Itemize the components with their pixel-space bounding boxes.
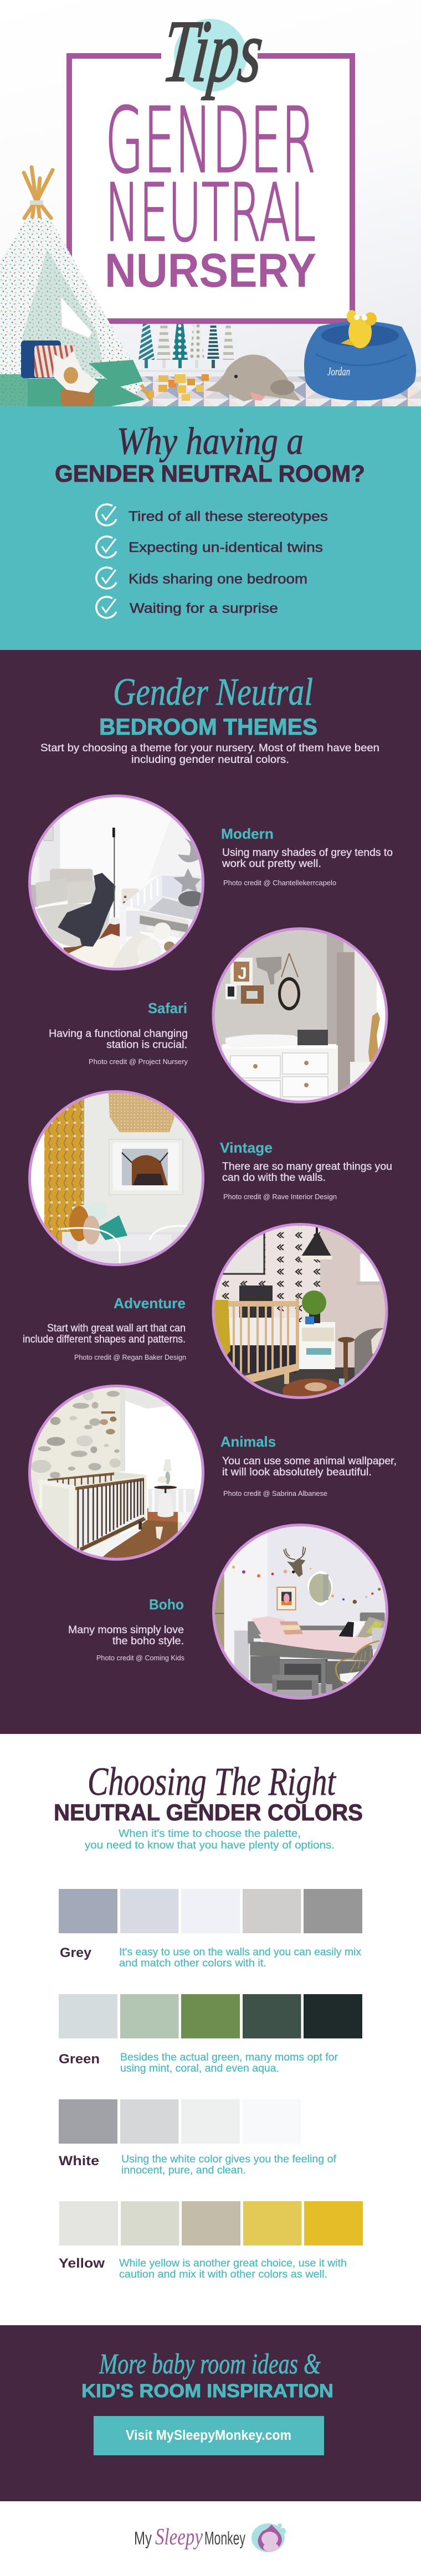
text: safari: Photo credit @ Project Nursery xyxy=(89,1057,188,1066)
text: boho xyxy=(68,1596,184,1662)
photo: animals nursery xyxy=(28,1385,204,1561)
list item 1: Tired of all these stereotypes xyxy=(129,509,328,524)
heading script: More baby room ideas & xyxy=(99,2348,321,2380)
intro text xyxy=(85,1828,335,1851)
text: green: Besides the actual green, many moms opt for xyxy=(120,2052,338,2063)
icon: tips accent circle xyxy=(174,19,247,92)
photo: boho nursery xyxy=(212,1524,388,1700)
text: animals xyxy=(220,1433,397,1498)
text: adventure: Start with great wall art that can xyxy=(47,1323,186,1334)
panel: bedroom themes xyxy=(0,650,421,1734)
floor rug xyxy=(133,370,421,406)
photo: safari nursery xyxy=(212,927,388,1103)
text: safari xyxy=(49,1000,188,1066)
text: adventure xyxy=(23,1295,186,1361)
toy blocks xyxy=(148,374,209,401)
text: safari: station is crucial. xyxy=(106,1039,187,1051)
text: safari: Having a functional changing xyxy=(49,1028,188,1040)
heading bold: NEUTRAL GENDER COLORS xyxy=(54,1799,363,1825)
list item 4: Waiting for a surprise xyxy=(130,601,278,616)
text: adventure: Photo credit @ Regan Baker Design xyxy=(74,1353,186,1361)
swatches: white xyxy=(59,2099,301,2144)
text: grey: and match other colors with it. xyxy=(119,1958,266,1969)
text: white: innocent, pure, and clean. xyxy=(121,2165,246,2176)
text: vintage: There are so many great things you xyxy=(222,1161,392,1173)
text: animals: Animals xyxy=(220,1433,276,1450)
intro text: When it's time to choose the palette, xyxy=(119,1828,301,1840)
photo: safari nursery: J xyxy=(238,964,247,983)
title: Nursery: NURSERY xyxy=(105,244,316,297)
text: boho: Boho xyxy=(149,1596,184,1613)
logo: My Sleepy Monkey xyxy=(134,2523,286,2552)
hanging felt trees xyxy=(138,324,234,368)
text: animals: Photo credit @ Sabrina Albanese xyxy=(223,1489,327,1498)
text: yellow: caution and mix it with other colors as well. xyxy=(119,2269,327,2280)
logo: My Sleepy Monkey: My xyxy=(134,2528,152,2548)
text: grey xyxy=(60,1945,361,1969)
panel: call to action xyxy=(0,2325,421,2501)
text: grey: It's easy to use on the walls and you can easily mix xyxy=(119,1947,361,1958)
panel: neutral gender colors xyxy=(54,1759,363,2280)
text: boho: the boho style. xyxy=(112,1635,184,1647)
text: vintage: can do with the walls. xyxy=(222,1172,326,1184)
heading bold: GENDER NEUTRAL ROOM? xyxy=(55,461,365,487)
text: grey: Grey xyxy=(60,1945,92,1960)
title: Tips: Tips xyxy=(158,2,268,100)
bean bag chair: Jordan xyxy=(327,365,350,378)
heading script: Why having a xyxy=(117,420,304,463)
icon: check 2 xyxy=(96,536,116,557)
intro text: including gender neutral colors. xyxy=(131,754,289,766)
text: adventure: include different shapes and patterns. xyxy=(23,1334,186,1345)
photo: modern nursery xyxy=(28,794,205,970)
button: Visit MySleepyMonkey.com xyxy=(126,2428,291,2443)
text: modern: Using many shades of grey tends to xyxy=(222,847,393,859)
teepee tent xyxy=(0,167,151,406)
text: green: using mint, coral, and even aqua. xyxy=(120,2063,279,2074)
icon: check 3 xyxy=(96,567,116,588)
yellow plush toy xyxy=(341,310,377,348)
intro text xyxy=(40,742,379,766)
panel: hero header xyxy=(0,0,421,406)
text: animals: it will look absolutely beautiful. xyxy=(222,1467,372,1478)
swatches: yellow xyxy=(59,2201,363,2245)
text: modern: Modern xyxy=(221,825,274,842)
text: vintage xyxy=(220,1139,392,1201)
photo: vintage nursery xyxy=(28,1090,204,1271)
photo: adventure nursery xyxy=(212,1223,388,1403)
list item 2: Expecting un-identical twins xyxy=(129,540,323,555)
text: animals: You can use some animal wallpaper, xyxy=(222,1455,397,1467)
bottom strip of hero xyxy=(0,406,421,650)
text: white: Using the white color gives you the feeling of xyxy=(121,2154,337,2165)
text: safari: Safari xyxy=(148,1000,187,1016)
text: yellow xyxy=(59,2256,347,2280)
purple title frame xyxy=(69,56,352,321)
text: adventure: Adventure xyxy=(114,1295,186,1312)
text: modern xyxy=(221,825,393,887)
text: modern: work out pretty well. xyxy=(222,858,321,870)
bean bag chair xyxy=(304,321,416,400)
swatches: grey xyxy=(59,1889,362,1933)
heading bold: KID'S ROOM INSPIRATION xyxy=(81,2381,333,2402)
plush rat xyxy=(205,354,301,401)
heading script: Gender Neutral xyxy=(113,671,313,714)
swatches: green xyxy=(59,1994,362,2038)
text: modern: Photo credit @ Chantellekerrcapelo xyxy=(223,879,336,887)
plush skull toy xyxy=(53,351,99,406)
text: white xyxy=(59,2154,337,2176)
intro text: you need to know that you have plenty of options. xyxy=(85,1840,335,1851)
text: green: Green xyxy=(59,2052,100,2067)
logo: My Sleepy Monkey: Sleepy xyxy=(155,2525,203,2550)
icon: sleeping monkey xyxy=(251,2523,286,2552)
icon: check 4 xyxy=(96,597,116,618)
text: boho: Photo credit @ Coming Kids xyxy=(96,1654,184,1662)
text: vintage: Photo credit @ Rave Interior Design xyxy=(223,1193,337,1201)
heading bold: BEDROOM THEMES xyxy=(99,714,317,740)
panel: why gender neutral room xyxy=(55,420,365,618)
list item 3: Kids sharing one bedroom xyxy=(129,571,307,587)
text: yellow: Yellow xyxy=(59,2256,105,2271)
intro text: Start by choosing a theme for your nursery. Most of them have been xyxy=(40,742,379,754)
heading script: Choosing The Right xyxy=(88,1759,337,1804)
button xyxy=(94,2416,324,2455)
icon: check 1 xyxy=(96,504,116,525)
text: boho: Many moms simply love xyxy=(68,1624,184,1636)
logo: My Sleepy Monkey: Monkey xyxy=(204,2528,245,2548)
text: green xyxy=(59,2052,338,2074)
text: white: White xyxy=(59,2154,99,2169)
text: vintage: Vintage xyxy=(220,1139,273,1156)
text: yellow: While yellow is another great choice, use it with xyxy=(119,2258,347,2269)
